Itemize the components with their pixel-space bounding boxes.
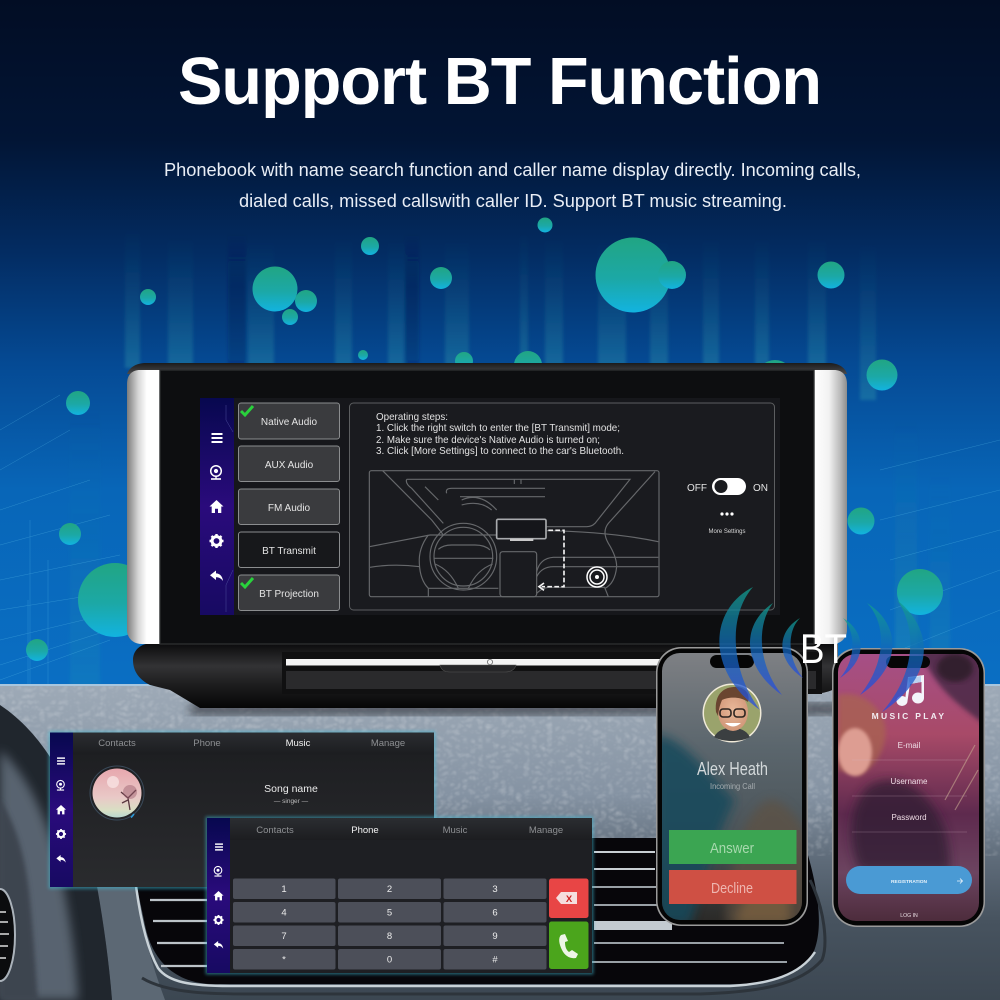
phone: music play (832, 648, 985, 927)
music play title: MUSIC PLAY (872, 711, 946, 721)
registration form fields: Password (891, 813, 927, 822)
dialer sidebar (207, 818, 230, 973)
phone dialer window (206, 816, 594, 974)
more settings: More Settings (708, 529, 746, 535)
registration form fields (852, 741, 967, 832)
song name: Song name (264, 783, 318, 795)
music app screen (838, 650, 985, 921)
dialer keypad: 2 (387, 884, 392, 895)
dashboard: textured top surface (0, 684, 1000, 1000)
incoming call screen (662, 653, 802, 920)
description text: dialed calls, missed callswith caller ID. Support BT music streaming. (239, 191, 787, 211)
right silver end cap (814, 370, 847, 644)
dashboard: steering wheel (0, 705, 165, 1000)
dialer keypad: 1 (281, 884, 287, 895)
OFF / ON toggle: OFF (687, 483, 707, 494)
log in link: LOG IN (900, 913, 918, 919)
dialer header tabs (230, 818, 592, 840)
caller name: Incoming Call (710, 781, 755, 791)
audio source buttons (238, 403, 340, 610)
dashboard: air vent (135, 838, 825, 994)
registration button: REGISTRATION (891, 879, 927, 885)
dialer keypad: 8 (387, 931, 392, 942)
music note logo (896, 675, 924, 706)
operating steps text (376, 411, 624, 457)
audio source buttons: Native Audio (261, 417, 318, 428)
music window sidebar (50, 732, 73, 887)
UI sidebar (200, 398, 234, 615)
decline button: Decline (711, 880, 753, 897)
call key (549, 922, 588, 969)
song name (264, 783, 318, 805)
device base stand (133, 644, 838, 708)
operating steps text: Operating steps: (376, 411, 448, 423)
album art (90, 766, 144, 820)
dialer keypad: 0 (387, 954, 392, 966)
screen (160, 370, 814, 644)
caller avatar (702, 684, 762, 742)
device: car display (127, 363, 847, 715)
dialer keypad: 6 (492, 908, 498, 918)
dialer keypad: 4 (281, 908, 287, 918)
dialer header tabs: Manage (529, 825, 563, 836)
answer button: Answer (710, 840, 754, 857)
decline button (669, 870, 796, 904)
dialer keypad: 7 (281, 931, 287, 942)
music window header tabs: Music (286, 738, 311, 749)
background: wave grid lines (0, 395, 1000, 685)
operating steps text: 3. Click [More Settings] to connect to the car's Bluetooth. (376, 445, 624, 457)
dialer keypad (233, 878, 546, 970)
screen UI background (234, 398, 780, 615)
phone: incoming call (655, 647, 810, 926)
audio source buttons: BT Projection (259, 589, 319, 600)
music window header tabs: Phone (193, 738, 221, 749)
audio source buttons: AUX Audio (265, 460, 314, 471)
notch (886, 656, 930, 668)
device lower recessed bar (282, 652, 822, 694)
BT label: BT (800, 625, 847, 672)
status bar notch (710, 655, 754, 668)
background: blue gradient (0, 0, 1000, 700)
device base shadow (190, 703, 840, 715)
dialer keypad: 3 (492, 884, 498, 895)
dialer header tabs: Contacts (256, 825, 294, 836)
OFF / ON toggle (687, 478, 768, 495)
device top edge (127, 363, 847, 374)
music window header tabs: Manage (371, 738, 405, 749)
registration button (846, 866, 972, 894)
registration form fields: E-mail (898, 741, 921, 750)
audio source buttons: BT Transmit (262, 546, 316, 557)
operating steps text: 2. Make sure the device's Native Audio is turned on; (376, 434, 600, 446)
dialer keypad: # (492, 954, 498, 966)
answer button (669, 830, 796, 864)
title: Support BT Function (178, 45, 822, 119)
dialer keypad: * (282, 954, 286, 966)
background: equalizer stripes (70, 228, 950, 690)
left silver end cap (127, 370, 160, 644)
delete key: X (566, 894, 573, 905)
caller name: Alex Heath (697, 759, 768, 779)
dialer header tabs: Music (443, 825, 468, 836)
music window header tabs (73, 732, 434, 754)
dialer keypad: 9 (492, 931, 498, 942)
background: teal bubbles (26, 218, 943, 661)
dialer keypad: 5 (387, 908, 392, 918)
car interior line diagram (369, 471, 659, 597)
caller name (697, 759, 768, 791)
song name: — singer — (274, 798, 309, 805)
delete key (549, 878, 588, 918)
audio source buttons: FM Audio (268, 503, 311, 514)
dialer header tabs: Phone (351, 825, 379, 836)
music app window (48, 731, 436, 889)
description text: Phonebook with name search function and caller name display directly. Incoming calls, (164, 160, 861, 180)
operating steps panel (350, 403, 774, 610)
bluetooth signal arcs (719, 587, 924, 712)
registration form fields: Username (891, 777, 928, 786)
description text (164, 160, 861, 211)
OFF / ON toggle: ON (753, 483, 768, 494)
music window header tabs: Contacts (98, 738, 136, 749)
operating steps text: 1. Click the right switch to enter the [BT Transmit] mode; (376, 422, 620, 434)
more settings (708, 512, 746, 535)
